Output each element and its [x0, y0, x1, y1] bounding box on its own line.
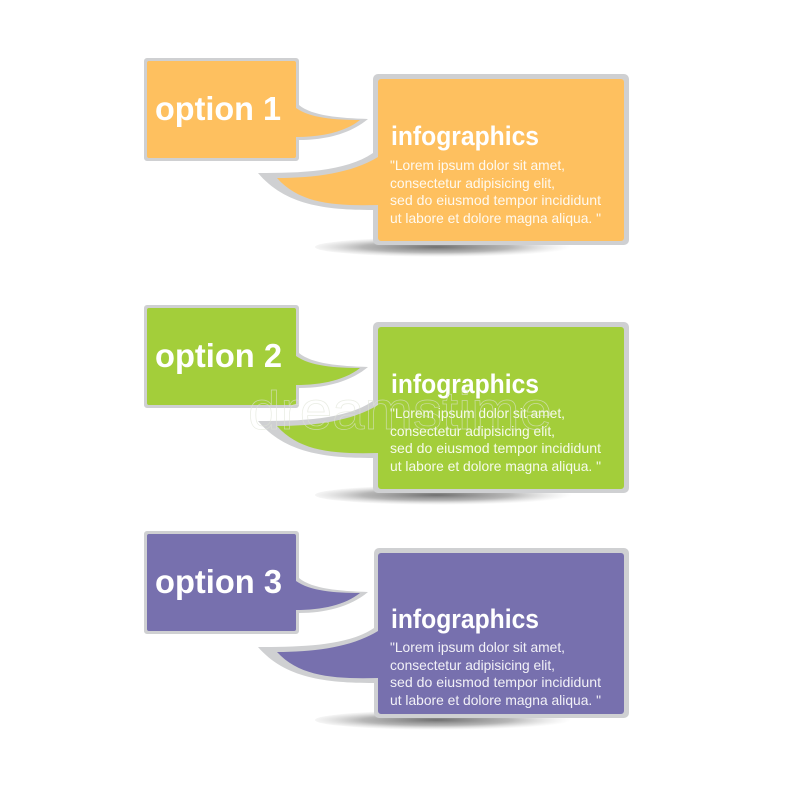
infographics bubble — [258, 74, 629, 245]
label text: option 2 — [155, 337, 282, 374]
shadow — [315, 485, 585, 505]
label text: option 1 — [155, 90, 281, 127]
panel: option 2 group — [144, 305, 629, 505]
body text: "Lorem ipsum dolor sit amet, — [390, 405, 565, 421]
body text: consectetur adipisicing elit, — [390, 657, 555, 673]
body text — [390, 157, 601, 226]
infographics bubble — [258, 548, 629, 718]
body text: consectetur adipisicing elit, — [390, 423, 555, 439]
body text: "Lorem ipsum dolor sit amet, — [390, 157, 565, 173]
body text: sed do eiusmod tempor incididunt — [390, 674, 601, 690]
shadow — [315, 710, 585, 730]
body text: "Lorem ipsum dolor sit amet, — [390, 639, 565, 655]
shadow — [315, 237, 585, 257]
body text: sed do eiusmod tempor incididunt — [390, 440, 601, 456]
infographics bubble — [258, 322, 629, 493]
option 3 label bubble — [144, 531, 368, 634]
heading: infographics — [391, 369, 539, 399]
panel: option 3 group — [144, 531, 629, 730]
heading: infographics — [391, 121, 539, 151]
heading: infographics — [391, 604, 539, 634]
body text: ut labore et dolore magna aliqua. " — [390, 210, 601, 226]
body text: sed do eiusmod tempor incididunt — [390, 192, 601, 208]
body text: ut labore et dolore magna aliqua. " — [390, 692, 601, 708]
panel: option 1 group — [144, 58, 629, 257]
body text: ut labore et dolore magna aliqua. " — [390, 458, 601, 474]
watermark: dreamstime — [248, 381, 552, 441]
body text — [390, 405, 601, 474]
option 1 label bubble — [144, 58, 368, 161]
body text: consectetur adipisicing elit, — [390, 175, 555, 191]
label text: option 3 — [155, 563, 282, 600]
option 2 label bubble — [144, 305, 368, 408]
body text — [390, 639, 601, 708]
